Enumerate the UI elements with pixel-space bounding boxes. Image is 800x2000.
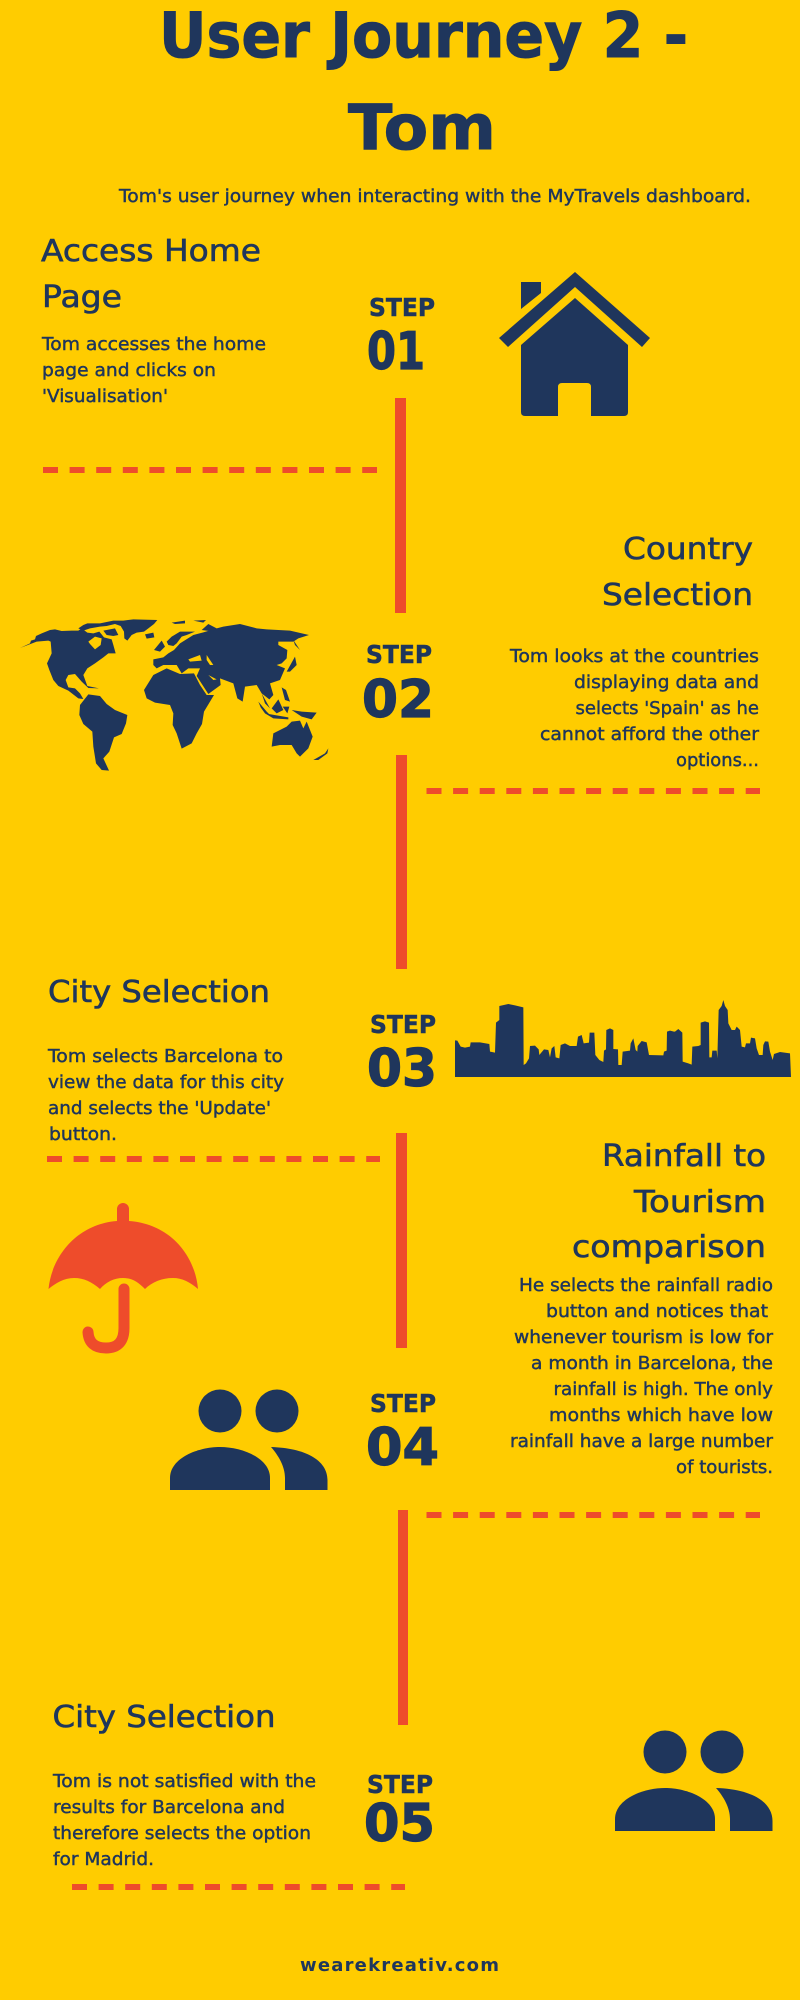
heading: access home page: [41, 234, 261, 315]
text: step 3 description: Tom selects Barcelona to: [47, 1047, 283, 1067]
heading: city selection: City Selection: [48, 975, 270, 1010]
step label 04: STEP: [370, 1389, 436, 1418]
dashed divider 3: [47, 1156, 380, 1162]
icon: umbrella: [48, 1203, 198, 1348]
text: step 5 description: therefore selects the option: [53, 1824, 311, 1844]
heading: rainfall to tourism comparison: comparison: [572, 1230, 766, 1265]
text: step 5 description: results for Barcelona and: [53, 1798, 285, 1818]
icon: people: [170, 1390, 328, 1490]
step label 05: STEP: [367, 1770, 433, 1799]
step label 03: STEP: [370, 1010, 436, 1039]
text: step 5 description: for Madrid.: [53, 1850, 154, 1870]
dashed divider 4: [426, 1512, 760, 1518]
panel: step 1 access home page: [41, 234, 650, 470]
footer: wearekreativ.com: [300, 1955, 499, 1976]
heading: city selection: City Selection: [52, 1700, 276, 1735]
text: step 2 description: displaying data and: [574, 673, 759, 693]
connector line 1: [395, 398, 406, 613]
title: User Journey 2 -: [159, 0, 688, 72]
text: step 2 description: Tom looks at the countries: [509, 647, 759, 667]
step label 02: STEP: [366, 640, 432, 669]
heading: access home page: Access Home: [41, 234, 261, 269]
icon: city skyline: [455, 1000, 791, 1077]
subtitle: Tom's user journey when interacting with the MyTravels dashboard.: [118, 186, 751, 207]
icon: house: [499, 272, 650, 416]
text: step 4 description: [510, 1276, 774, 1478]
panel: step 2 country selection: [20, 532, 760, 791]
panel: step 5 city selection: [52, 1700, 773, 1887]
dashed divider 2: [426, 788, 760, 794]
text: step 4 description: whenever tourism is low for: [514, 1328, 774, 1348]
title: Tom: [348, 91, 496, 164]
text: step 1 description: 'Visualisation': [42, 387, 168, 407]
heading: rainfall to tourism comparison: Tourism: [633, 1185, 766, 1220]
heading: country selection: Country: [623, 532, 753, 567]
text: step 5 description: Tom is not satisfied with the: [52, 1772, 316, 1792]
step label 04: [366, 1389, 439, 1478]
text: step 1 description: page and clicks on: [42, 361, 216, 381]
step label 02: 02: [362, 670, 434, 730]
text: step 3 description: and selects the 'Update': [48, 1099, 271, 1119]
heading: country selection: [602, 532, 753, 613]
text: step 3 description: [47, 1047, 284, 1145]
text: step 5 description: [52, 1772, 316, 1870]
heading: access home page: Page: [42, 280, 122, 315]
text: step 2 description: [509, 647, 760, 771]
text: step 2 description: selects 'Spain' as he: [576, 699, 759, 719]
dashed divider 5: [72, 1884, 405, 1890]
step label 03: [367, 1010, 437, 1099]
icon: world map: [20, 619, 328, 771]
step label 03: 03: [367, 1039, 437, 1099]
text: step 4 description: He selects the rainfall radio: [519, 1276, 773, 1296]
text: step 4 description: button and notices that: [546, 1302, 768, 1322]
step label 05: 05: [364, 1794, 435, 1854]
step label 01: [367, 293, 435, 382]
text: step 1 description: Tom accesses the home: [41, 335, 266, 355]
heading: rainfall to tourism comparison: Rainfall to: [602, 1139, 766, 1174]
connector line 3: [396, 1133, 407, 1348]
heading: rainfall to tourism comparison: [572, 1139, 766, 1265]
step label 01: STEP: [369, 293, 435, 322]
text: step 1 description: [41, 335, 266, 407]
connector line 2: [396, 755, 407, 969]
icon: people: [615, 1730, 772, 1831]
text: step 2 description: cannot afford the other: [540, 725, 760, 745]
text: step 4 description: of tourists.: [676, 1458, 773, 1478]
dashed divider 1: [43, 467, 377, 473]
heading: country selection: Selection: [602, 578, 753, 613]
text: step 2 description: options...: [676, 751, 759, 771]
connector line 4: [398, 1510, 408, 1725]
text: step 4 description: a month in Barcelona, the: [531, 1354, 773, 1374]
text: step 4 description: rainfall is high. The only: [554, 1380, 773, 1400]
step label 02: [362, 640, 434, 730]
title: [159, 0, 688, 164]
text: step 3 description: view the data for this city: [48, 1073, 284, 1093]
text: step 3 description: button.: [49, 1125, 117, 1145]
step label 01: 01: [367, 322, 425, 382]
step label 04: 04: [366, 1418, 439, 1478]
text: step 4 description: rainfall have a large number: [510, 1432, 774, 1452]
panel: step 3 city selection: [47, 975, 791, 1159]
text: step 4 description: months which have low: [549, 1406, 773, 1426]
panel: step 4 rainfall to tourism comparison: [170, 1139, 774, 1515]
